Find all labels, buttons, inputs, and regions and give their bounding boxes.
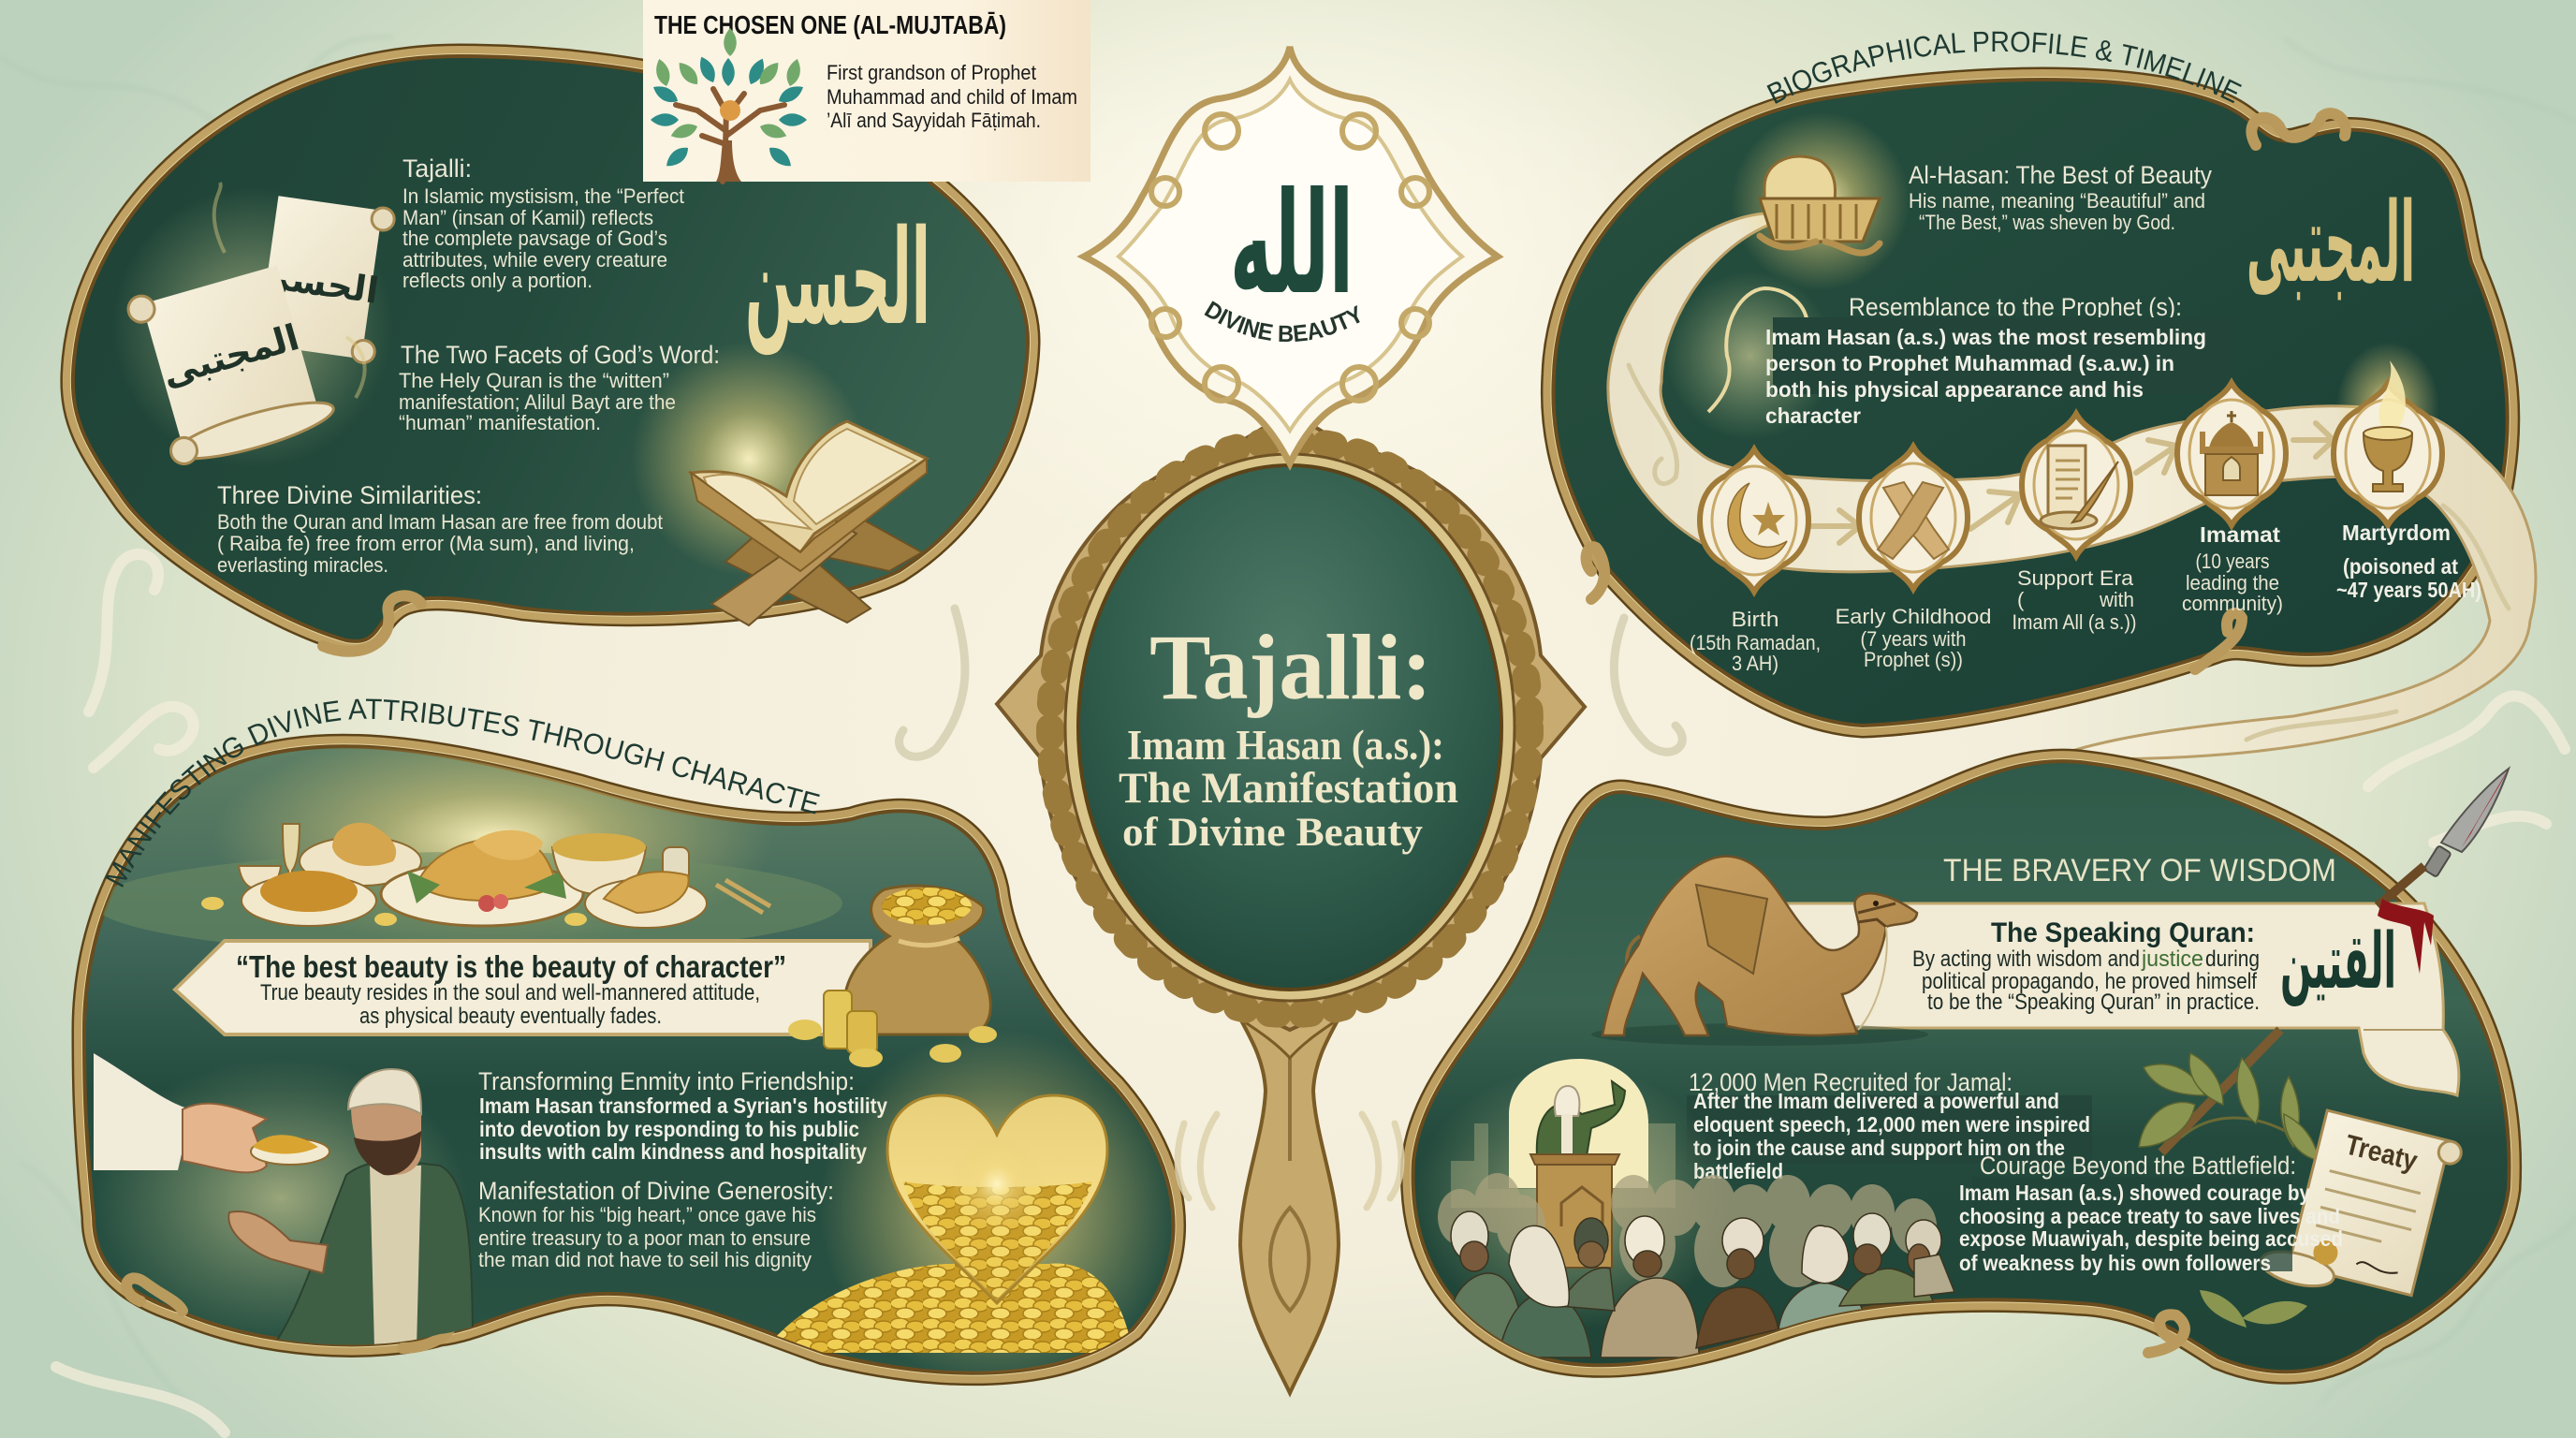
heading: bravery of wisdom: THE BRAVERY OF WISDOM	[1943, 853, 2336, 888]
icon: golden heart and coins	[777, 1039, 1166, 1372]
text block: enmity into friendship: Transforming Enmity into Friendship:	[478, 1067, 855, 1095]
text block: courage: expose Muawiyah, despite being accused	[1959, 1226, 2343, 1251]
icon: treaty scroll: Treaty	[2342, 1129, 2421, 1177]
timeline labels: (15th Ramadan,	[1690, 631, 1821, 654]
text block: courage	[1959, 1152, 2343, 1275]
icon: bloodied spear	[2378, 769, 2509, 974]
mirror glass	[1078, 465, 1501, 990]
panel frame	[1413, 761, 2510, 1372]
Allah calligraphy: الله	[1230, 163, 1354, 326]
text block: Tajalli: reflects only a portion.	[402, 269, 593, 292]
card: the chosen one	[643, 0, 1090, 182]
illustration: speaker and crowd	[1413, 1059, 1954, 1357]
text block: two facets	[399, 341, 720, 434]
text block: best of beauty: His name, meaning “Beautiful” and	[1909, 189, 2205, 213]
text block: enmity into friendship: into devotion by responding to his public	[479, 1117, 859, 1141]
timeline labels: (10 years	[2196, 550, 2269, 573]
text block: 12,000 men: eloquent speech, 12,000 men were inspired	[1693, 1112, 2090, 1137]
arrows on ribbon	[1811, 423, 2334, 543]
title: Tajalli:	[1149, 615, 1432, 719]
timeline labels	[1690, 521, 2481, 675]
text block: divine generosity: the man did not have to seil his dignity	[478, 1248, 812, 1271]
text block: three similarities: Three Divine Similarities:	[217, 481, 482, 509]
text block: speaking Quran: The Speaking Quran:	[1991, 917, 2255, 948]
emblem caption: DIVINE BEAUTY	[1204, 301, 1360, 342]
text block: speaking Quran: political propagando, he proved himself	[1922, 969, 2257, 994]
timeline node: imamat	[2177, 383, 2286, 525]
card: the chosen one: Muhammad and child of Imam	[827, 85, 1077, 109]
panel: top left, Tajalli concept	[73, 56, 1028, 652]
title: Imam Hasan (a.s.):	[1127, 722, 1444, 769]
text block: courage: Imam Hasan (a.s.) showed courage by	[1959, 1181, 2310, 1205]
panel frame	[84, 746, 1174, 1373]
text block: two facets: The Two Facets of God’s Word:	[401, 341, 720, 369]
timeline labels: Imam All (a s.))	[2012, 610, 2136, 634]
text block: three similarities: Both the Quran and Imam Hasan are free from doubt	[217, 510, 663, 534]
text block: 12,000 men: After the Imam delivered a powerful and	[1693, 1089, 2059, 1113]
illustration: feast	[103, 747, 842, 942]
text block: courage: Courage Beyond the Battlefield:	[1980, 1152, 2296, 1180]
text block: speaking Quran: By acting with wisdom and	[1912, 946, 2140, 972]
timeline ribbon	[1608, 213, 2536, 759]
panel: bottom left, character	[84, 726, 1175, 1386]
timeline labels: (	[2017, 588, 2025, 611]
timeline labels: community)	[2182, 592, 2283, 615]
text block: two facets: manifestation; Alilul Bayt are the	[399, 390, 676, 414]
timeline labels: Early Childhood	[1835, 605, 1992, 628]
text block: best of beauty: “The Best,” was sheven by God.	[1919, 211, 2175, 234]
timeline labels: with	[2099, 588, 2134, 611]
timeline labels: leading the	[2186, 571, 2279, 594]
text block: two facets: The Hely Quran is the “witten”	[399, 369, 669, 392]
text block: best of beauty: Al-Hasan: The Best of Beauty	[1909, 161, 2212, 189]
text block: courage: of weakness by his own followers	[1959, 1251, 2271, 1275]
timeline node: early childhood	[1859, 447, 1968, 589]
text block: Tajalli: Tajalli:	[402, 154, 472, 183]
icon: glowing silhouette	[1666, 271, 1835, 440]
text block: enmity into friendship: insults with calm kindness and hospitality	[479, 1139, 867, 1164]
text block: Tajalli: attributes, while every creature	[402, 248, 667, 271]
icon: two scrolls	[112, 183, 396, 471]
banner: quote	[175, 941, 871, 1034]
panel: bottom right, bravery of wisdom: القتين	[2280, 917, 2396, 1006]
banner: quote: “The best beauty is the beauty of character”	[236, 949, 786, 984]
panel: bottom right, bravery of wisdom	[1413, 761, 2510, 1372]
banner scroll	[1783, 903, 2459, 1095]
panel: top left, Tajalli concept: الحسن	[745, 202, 930, 355]
card: the chosen one: First grandson of Prophet	[827, 61, 1036, 84]
icon: family tree	[651, 28, 807, 182]
panel frame	[73, 56, 1028, 652]
icon: treaty scroll	[2258, 1104, 2464, 1315]
text block: Tajalli: Man” (insan of Kamil) reflects	[402, 206, 653, 229]
text block: resemblance	[1765, 293, 2231, 428]
timeline node: support era	[2022, 414, 2130, 556]
timeline labels: ~47 years 50AH)	[2336, 578, 2481, 602]
text block: two facets: “human” manifestation.	[399, 411, 601, 434]
text block: resemblance: Imam Hasan (a.s.) was the most resembling	[1765, 325, 2206, 349]
text block: enmity into friendship	[478, 1067, 887, 1164]
timeline node: martyrdom	[2334, 342, 2442, 525]
text block: resemblance: Resemblance to the Prophet (s):	[1849, 293, 2182, 321]
illustration: Syrian man	[228, 1069, 473, 1348]
timeline labels: (7 years with	[1861, 627, 1966, 651]
icon: bag of gold	[788, 886, 997, 1067]
text block: speaking Quran	[1912, 917, 2260, 1015]
text block: 12,000 men: battlefield	[1693, 1159, 1783, 1183]
central mirror	[997, 412, 1585, 1393]
timeline labels: Support Era	[2017, 566, 2134, 590]
timeline node: birth	[1700, 449, 1808, 592]
icon: olive branch with staff	[2139, 1030, 2321, 1328]
title: The Manifestation	[1119, 764, 1458, 813]
text block: three similarities	[217, 481, 663, 577]
text block: best of beauty	[1909, 161, 2212, 234]
title: of Divine Beauty	[1122, 811, 1424, 855]
panel: top right, biography and timeline	[1541, 32, 2537, 760]
ornate frame	[997, 412, 1585, 1030]
text block: three similarities: ( Raiba fe) free from error (Ma sum), and living,	[217, 532, 635, 555]
banner: quote: True beauty resides in the soul and well-mannered attitude,	[260, 980, 760, 1005]
text block: 12,000 men: to join the cause and support him on the	[1693, 1136, 2065, 1160]
banner: quote: as physical beauty eventually fades.	[359, 1004, 662, 1029]
card: the chosen one: THE CHOSEN ONE (AL-MUJTABĀ)	[654, 10, 1006, 39]
title	[1119, 615, 1458, 855]
illustration: giving hand	[94, 1053, 446, 1326]
text block: 12,000 men	[1687, 1068, 2092, 1183]
timeline labels: Martyrdom	[2342, 521, 2451, 545]
mirror handle	[1178, 992, 1401, 1393]
text block: three similarities: everlasting miracles.	[217, 553, 388, 577]
timeline labels: 3 AH)	[1732, 652, 1778, 675]
text block: courage: choosing a peace treaty to save lives and	[1959, 1204, 2340, 1228]
illustration: kneeling camel	[1591, 857, 1928, 1046]
timeline labels: Imamat	[2200, 522, 2280, 547]
icon: two scrolls: الحسن	[257, 255, 381, 312]
text block: speaking Quran: justice	[2141, 946, 2203, 972]
panel frame	[1553, 80, 2508, 726]
icon: open Quran on stand	[632, 342, 927, 625]
text block: resemblance: person to Prophet Muhammad (s.a.w.) in	[1765, 351, 2174, 375]
text block: resemblance: both his physical appearance and his	[1765, 377, 2144, 402]
icon: cradle	[1732, 112, 1910, 290]
text block: Tajalli: the complete pavsage of God’s	[402, 227, 667, 250]
text block: 12,000 men: 12,000 Men Recruited for Jamal:	[1689, 1068, 2012, 1096]
text block: resemblance: character	[1765, 404, 1861, 428]
text block: enmity into friendship: Imam Hasan transformed a Syrian's hostility	[479, 1093, 887, 1118]
icon: two scrolls: المجتبى	[157, 316, 303, 395]
timeline labels: Birth	[1732, 608, 1778, 631]
card: the chosen one: ’Alī and Sayyidah Fāṭimah.	[827, 109, 1041, 132]
text block: divine generosity: Known for his “big heart,” once gave his	[478, 1203, 816, 1226]
text block: Tajalli: In Islamic mystisism, the “Perfect	[402, 184, 684, 208]
text block: divine generosity	[478, 1177, 834, 1271]
heading: biographical profile: BIOGRAPHICAL PROFILE & TIMELINE	[1767, 32, 2242, 104]
text block: speaking Quran: to be the “Speaking Quran” in practice.	[1927, 990, 2260, 1015]
timeline labels: Prophet (s))	[1864, 648, 1963, 671]
text block: Tajalli	[402, 154, 684, 292]
text block: speaking Quran: during	[2205, 946, 2260, 972]
emblem: divine beauty	[1076, 46, 1504, 471]
text block: divine generosity: entire treasury to a poor man to ensure	[478, 1226, 811, 1250]
timeline labels: (poisoned at	[2343, 554, 2458, 579]
text block: divine generosity: Manifestation of Divine Generosity:	[478, 1177, 834, 1205]
